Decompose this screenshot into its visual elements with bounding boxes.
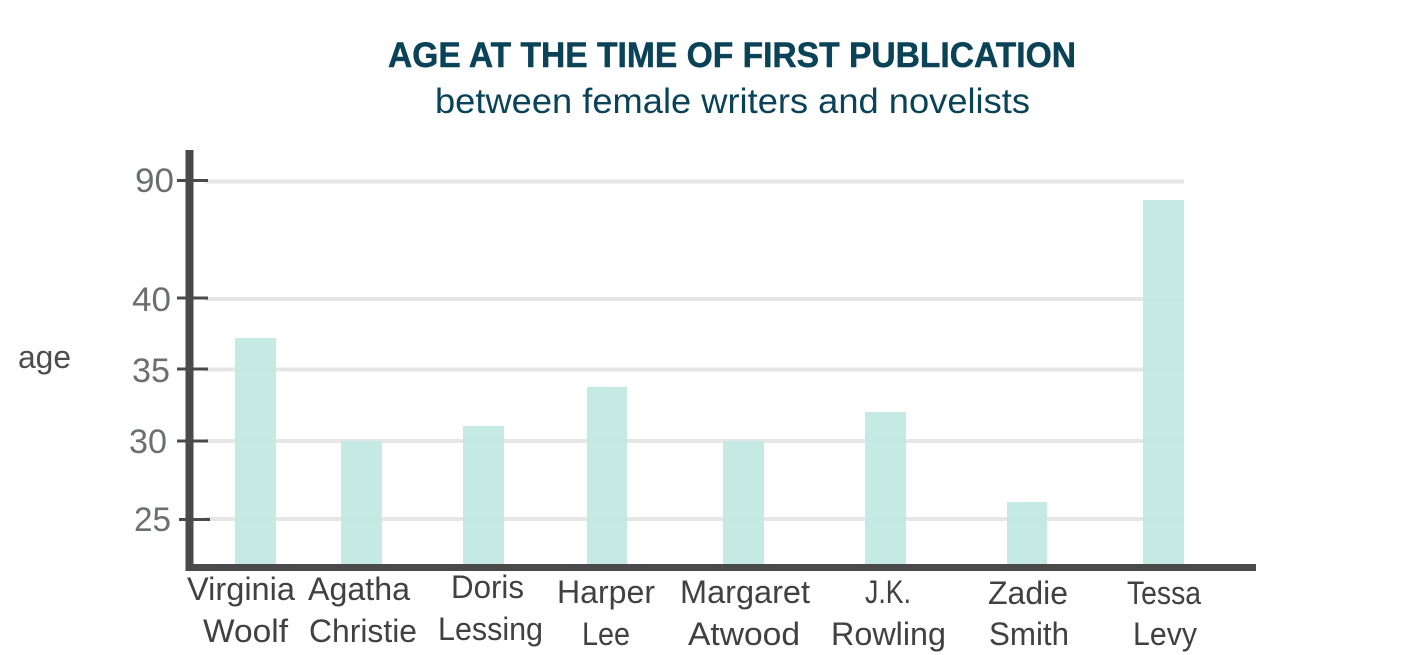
x axis labels: Doris (451, 569, 524, 605)
title: between female writers and novelists (435, 82, 1030, 121)
y axis tick labels: 40 (132, 281, 171, 319)
x axis labels: Atwood (688, 616, 800, 652)
x axis labels: Woolf (203, 613, 288, 649)
x axis labels: Rowling (831, 616, 946, 652)
x axis labels: Lee (582, 616, 630, 652)
x axis labels: Agatha (308, 571, 410, 607)
y axis tick labels: 25 (134, 501, 171, 539)
bar: Virginia Woolf (235, 338, 276, 566)
bar: Margaret Atwood (723, 441, 764, 566)
bar: Tessa Levy (1143, 200, 1184, 566)
x axis labels: J.K. (865, 574, 911, 610)
x axis labels: Virginia (187, 571, 295, 607)
axes (177, 150, 1256, 571)
y axis tick labels: 90 (135, 162, 174, 200)
y axis tick labels: 30 (129, 423, 167, 461)
x axis labels: Harper (557, 574, 655, 610)
y axis tick labels (129, 162, 174, 539)
bar: Doris Lessing (463, 426, 504, 566)
x axis labels: Margaret (680, 574, 810, 610)
bar: J.K. Rowling (865, 412, 906, 566)
y axis label: age (18, 339, 71, 375)
x axis labels: Christie (309, 613, 417, 649)
x axis labels: Tessa (1127, 575, 1201, 611)
bar: Zadie Smith (1007, 502, 1047, 566)
bar: Agatha Christie (341, 441, 382, 566)
x axis labels: Smith (989, 616, 1069, 652)
title: AGE AT THE TIME OF FIRST PUBLICATION (388, 36, 1076, 75)
bar: Harper Lee (587, 387, 627, 566)
title (388, 36, 1076, 121)
x axis labels: Levy (1133, 616, 1197, 652)
y axis tick labels: 35 (132, 352, 170, 390)
x axis labels (187, 569, 1201, 652)
x axis labels: Lessing (438, 611, 543, 647)
x axis labels: Zadie (988, 575, 1068, 611)
bar chart (235, 200, 1184, 566)
